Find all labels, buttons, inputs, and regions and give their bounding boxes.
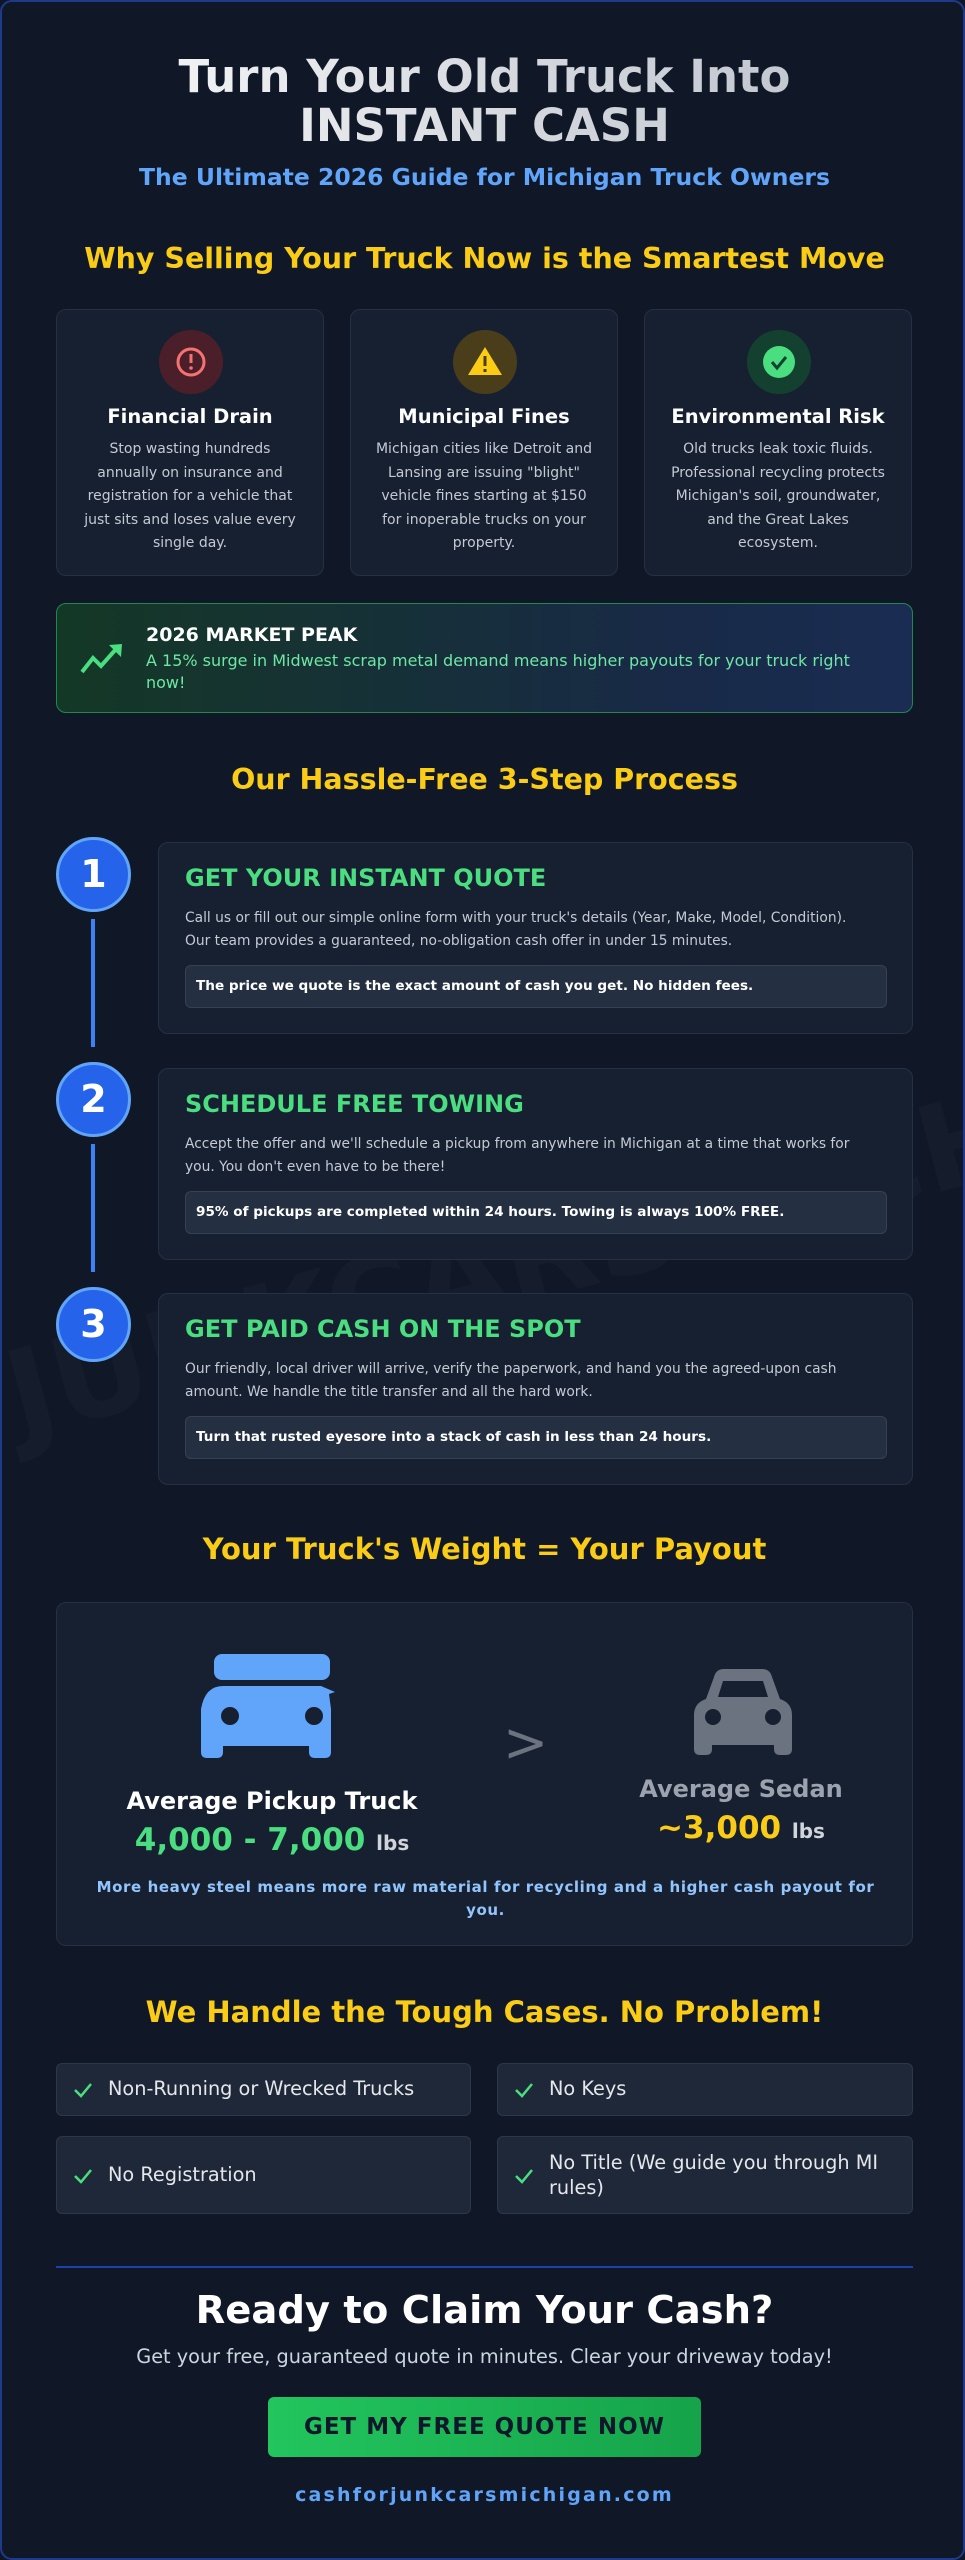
subtitle: The Ultimate 2026 Guide for Michigan Truck Owners bbox=[139, 163, 830, 191]
label: sedan: Average Sedan bbox=[639, 1775, 843, 1803]
panel: municipal fines bbox=[350, 309, 618, 576]
step 2 number: 2 bbox=[80, 1077, 107, 1121]
cta button: GET MY FREE QUOTE NOW bbox=[304, 2414, 665, 2440]
cta subtext: Get your free, guaranteed quote in minutes. Clear your driveway today! bbox=[136, 2345, 833, 2368]
panel: financial drain: just sits and loses value every bbox=[84, 512, 296, 528]
check: non-running: Non-Running or Wrecked Trucks bbox=[108, 2077, 414, 2100]
panel: financial drain: Stop wasting hundreds bbox=[110, 441, 270, 457]
callout: market peak: 2026 MARKET PEAK bbox=[146, 624, 357, 646]
panel: environmental risk: Professional recycling protects bbox=[671, 464, 885, 480]
icon: truck bbox=[201, 1654, 335, 1758]
step 1 card bbox=[158, 842, 913, 1034]
panel: environmental risk: Michigan's soil, groundwater, bbox=[676, 488, 880, 504]
step 1 card: The price we quote is the exact amount of cash you get. No hidden fees. bbox=[196, 978, 753, 994]
step 2 card: SCHEDULE FREE TOWING bbox=[185, 1090, 524, 1118]
heading: weight: Your Truck's Weight = Your Payout bbox=[203, 1532, 766, 1566]
panel: environmental risk: ecosystem. bbox=[738, 535, 818, 551]
check: no registration bbox=[56, 2136, 471, 2214]
step 3 card: Turn that rusted eyesore into a stack of cash in less than 24 hours. bbox=[196, 1429, 711, 1445]
panel: municipal fines: for inoperable trucks on your bbox=[382, 512, 586, 528]
panel: municipal fines: vehicle fines starting at $150 bbox=[381, 488, 587, 504]
label: pickup: Average Pickup Truck bbox=[127, 1787, 417, 1815]
panel: municipal fines: property. bbox=[453, 535, 515, 551]
step 1 card: Call us or fill out our simple online form with your truck's details (Year, Make, Model, Condition). bbox=[185, 910, 846, 926]
icon: sedan bbox=[694, 1669, 792, 1755]
heading: why selling: Why Selling Your Truck Now is the Smartest Move bbox=[84, 242, 885, 275]
cta button bbox=[268, 2397, 701, 2457]
heading: tough cases: We Handle the Tough Cases. No Problem! bbox=[146, 1995, 823, 2029]
step 3 number bbox=[56, 1287, 131, 1362]
step 2 number bbox=[56, 1062, 131, 1137]
icon: alert circle bbox=[159, 330, 223, 394]
icon: warning bbox=[453, 330, 517, 394]
step 1 card: Our team provides a guaranteed, no-obligation cash offer in under 15 minutes. bbox=[185, 933, 732, 949]
step 2 card: Accept the offer and we'll schedule a pickup from anywhere in Michigan at a time that works for bbox=[185, 1136, 849, 1152]
panel: weight comparison: 4,000 - 7,000 lbs bbox=[135, 1822, 409, 1858]
cta heading: Ready to Claim Your Cash? bbox=[196, 2288, 773, 2333]
panel: environmental risk bbox=[644, 309, 912, 576]
check: no title: No Title (We guide you through MI rules) bbox=[549, 2151, 878, 2199]
check: no keys: No Keys bbox=[549, 2077, 626, 2100]
step 2 card: you. You don't even have to be there! bbox=[185, 1159, 445, 1175]
step 2 card bbox=[158, 1068, 913, 1260]
callout: market peak bbox=[56, 603, 913, 713]
check: no keys bbox=[497, 2063, 913, 2116]
icon: check circle bbox=[747, 330, 811, 394]
footnote: More heavy steel means more raw material for recycling and a higher cash payout for you. bbox=[97, 1878, 874, 1919]
step 3 card bbox=[158, 1293, 913, 1485]
panel: financial drain: Financial Drain bbox=[107, 405, 273, 428]
title bbox=[2, 52, 965, 150]
greater-than sign: > bbox=[503, 1711, 548, 1774]
panel: municipal fines: Municipal Fines bbox=[398, 405, 570, 428]
step 3 number: 3 bbox=[80, 1302, 107, 1346]
panel: weight comparison bbox=[56, 1602, 913, 1946]
panel: municipal fines: Lansing are issuing "blight" bbox=[388, 464, 580, 480]
check: non-running bbox=[56, 2063, 471, 2116]
panel: weight comparison: ~3,000 lbs bbox=[657, 1810, 825, 1846]
step 1 card: GET YOUR INSTANT QUOTE bbox=[185, 864, 546, 892]
panel: financial drain: registration for a vehicle that bbox=[88, 488, 292, 504]
check: no title bbox=[497, 2136, 913, 2214]
step 3 card: amount. We handle the title transfer and all the hard work. bbox=[185, 1384, 593, 1400]
step 2 card: 95% of pickups are completed within 24 hours. Towing is always 100% FREE. bbox=[196, 1204, 784, 1220]
check: no registration: No Registration bbox=[108, 2163, 257, 2186]
step 3 card: GET PAID CASH ON THE SPOT bbox=[185, 1315, 581, 1343]
callout: market peak: A 15% surge in Midwest scrap metal demand means higher payouts for your truck right now! bbox=[146, 651, 850, 692]
step 3 card: Our friendly, local driver will arrive, verify the paperwork, and hand you the agreed-upon cash bbox=[185, 1361, 836, 1377]
step 1 number: 1 bbox=[80, 852, 107, 896]
title: INSTANT CASH bbox=[299, 99, 670, 152]
panel: environmental risk: and the Great Lakes bbox=[707, 512, 849, 528]
panel: environmental risk: Environmental Risk bbox=[671, 405, 885, 428]
website url: cashforjunkcarsmichigan.com bbox=[295, 2484, 674, 2506]
heading: process: Our Hassle-Free 3-Step Process bbox=[231, 763, 738, 796]
panel: financial drain: annually on insurance and bbox=[97, 464, 283, 480]
title: Turn Your Old Truck Into bbox=[179, 50, 790, 103]
panel: financial drain: single day. bbox=[153, 535, 227, 551]
panel: financial drain bbox=[56, 309, 324, 576]
panel: municipal fines: Michigan cities like Detroit and bbox=[376, 441, 592, 457]
step 1 number bbox=[56, 837, 131, 912]
icon: trend up bbox=[80, 644, 122, 674]
panel: environmental risk: Old trucks leak toxic fluids. bbox=[683, 441, 873, 457]
